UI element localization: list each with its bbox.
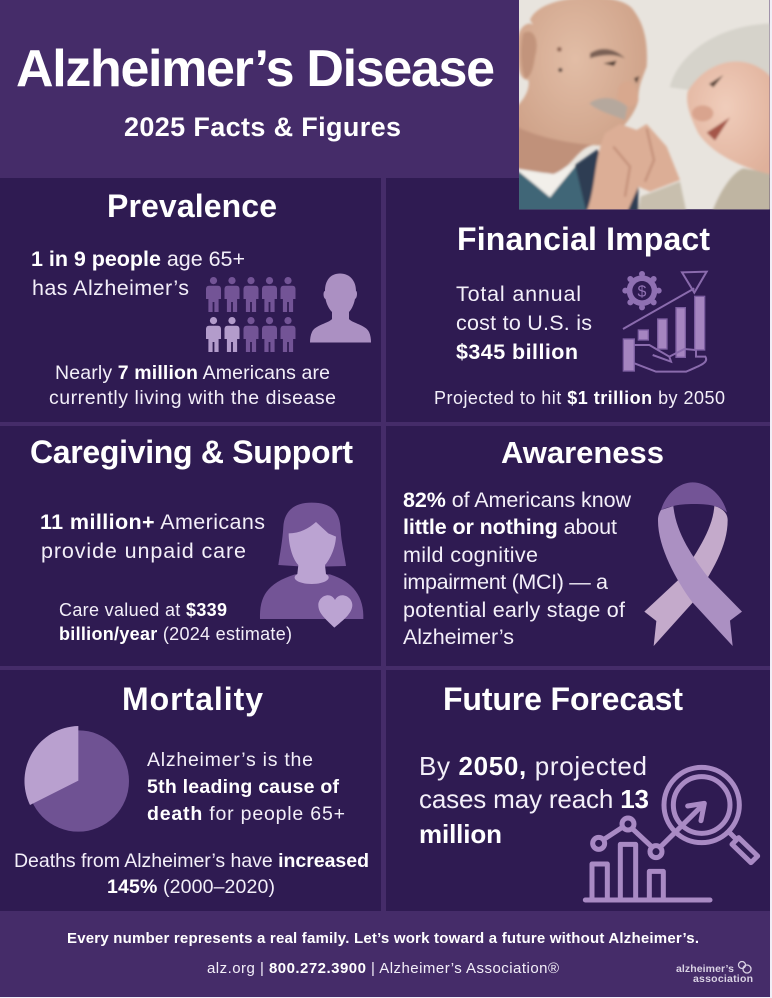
icon: group of ten people	[206, 277, 296, 352]
text: care valued: Care valued at $339	[59, 600, 227, 620]
panel: financial impact	[386, 178, 770, 422]
text: fifth leading cause: death for people 65+	[147, 803, 345, 825]
panel: mortality	[0, 670, 381, 911]
panel: future forecast	[386, 670, 770, 911]
heading: awareness: Awareness	[501, 435, 664, 470]
text: 82 percent of Americans: little or nothing about	[403, 515, 617, 539]
photo: elderly couple	[517, 0, 772, 213]
text: total annual cost: cost to U.S. is	[456, 311, 592, 335]
text: by 2050: cases may reach 13	[419, 784, 649, 814]
heading: prevalence: Prevalence	[107, 188, 277, 224]
title: Alzheimer’s Disease	[16, 40, 495, 98]
icon: caregiver with heart	[260, 503, 363, 628]
text: fifth leading cause: Alzheimer’s is the	[147, 749, 313, 771]
logo: alzheimer's association: association	[693, 973, 753, 985]
text: care valued	[59, 600, 292, 644]
text: 11 million: provide unpaid care	[41, 539, 246, 563]
text: by 2050: million	[419, 819, 502, 849]
panel: prevalence	[0, 178, 381, 422]
text: footer message: Every number represents a real family. Let’s work toward a future without Alzheimer’s.	[67, 930, 699, 947]
heading: caregiving and support: Caregiving & Support	[30, 434, 353, 470]
text: 82 percent of Americans: impairment (MCI) — a	[403, 570, 608, 594]
icon: financial growth chart	[622, 271, 707, 372]
text: 82 percent of Americans: Alzheimer’s	[403, 625, 514, 649]
text: has Alzheimer's: has Alzheimer’s	[32, 276, 189, 300]
text: 82 percent of Americans	[403, 488, 631, 649]
man sweater	[517, 165, 590, 213]
text: deaths increased: Deaths from Alzheimer’s have increased	[14, 850, 369, 872]
panel: footer	[67, 930, 753, 985]
text: fifth leading cause: 5th leading cause of	[147, 776, 340, 798]
text: fifth leading cause	[147, 749, 345, 825]
heading: mortality: Mortality	[122, 681, 263, 717]
woman hair	[670, 23, 772, 93]
text: projected to hit: Projected to hit $1 trillion by 2050	[434, 388, 725, 408]
text: total annual cost: Total annual	[456, 282, 581, 306]
text: 1 in 9 people: 1 in 9 people age 65+	[31, 247, 245, 271]
text: deaths increased: 145% (2000–2020)	[107, 876, 275, 898]
text: total annual cost: $345 billion	[456, 340, 578, 364]
panel: caregiving and support	[0, 426, 381, 666]
heading: financial impact: Financial Impact	[457, 221, 710, 257]
text: 82 percent of Americans: potential early stage of	[403, 598, 625, 622]
text: deaths increased	[14, 850, 369, 898]
text: currently living: currently living with the disease	[49, 387, 336, 409]
text: 11 million: 11 million+ Americans	[40, 510, 265, 534]
text: nearly 7 million: Nearly 7 million Americans are	[55, 362, 330, 384]
woman face	[687, 61, 772, 175]
chart: pie chart	[24, 726, 129, 832]
panel: awareness	[386, 426, 770, 666]
text: by 2050	[419, 751, 649, 849]
text: 11 million	[40, 510, 265, 563]
text: footer contact: alz.org | 800.272.3900 | Alzheimer’s Association®	[207, 960, 559, 977]
text: 82 percent of Americans: 82% of Americans know	[403, 488, 631, 512]
icon: financial growth chart: $	[638, 284, 647, 301]
logo: alzheimer's association	[676, 962, 753, 985]
icon: person bust	[310, 274, 371, 342]
icon: awareness ribbon	[644, 482, 742, 646]
text: total annual cost	[456, 282, 592, 364]
logo: alzheimer's association: alzheimer’s	[676, 963, 734, 975]
hands	[586, 124, 680, 213]
icon: forecast chart with magnifier	[585, 767, 758, 900]
heading: future forecast: Future Forecast	[443, 681, 683, 717]
man head	[519, 0, 648, 147]
text: by 2050: By 2050, projected	[419, 751, 647, 781]
text: care valued: billion/year (2024 estimate)	[59, 624, 292, 644]
woman cardigan	[712, 168, 772, 213]
text: 82 percent of Americans: mild cognitive	[403, 543, 538, 567]
subtitle: 2025 Facts & Figures	[124, 112, 401, 142]
